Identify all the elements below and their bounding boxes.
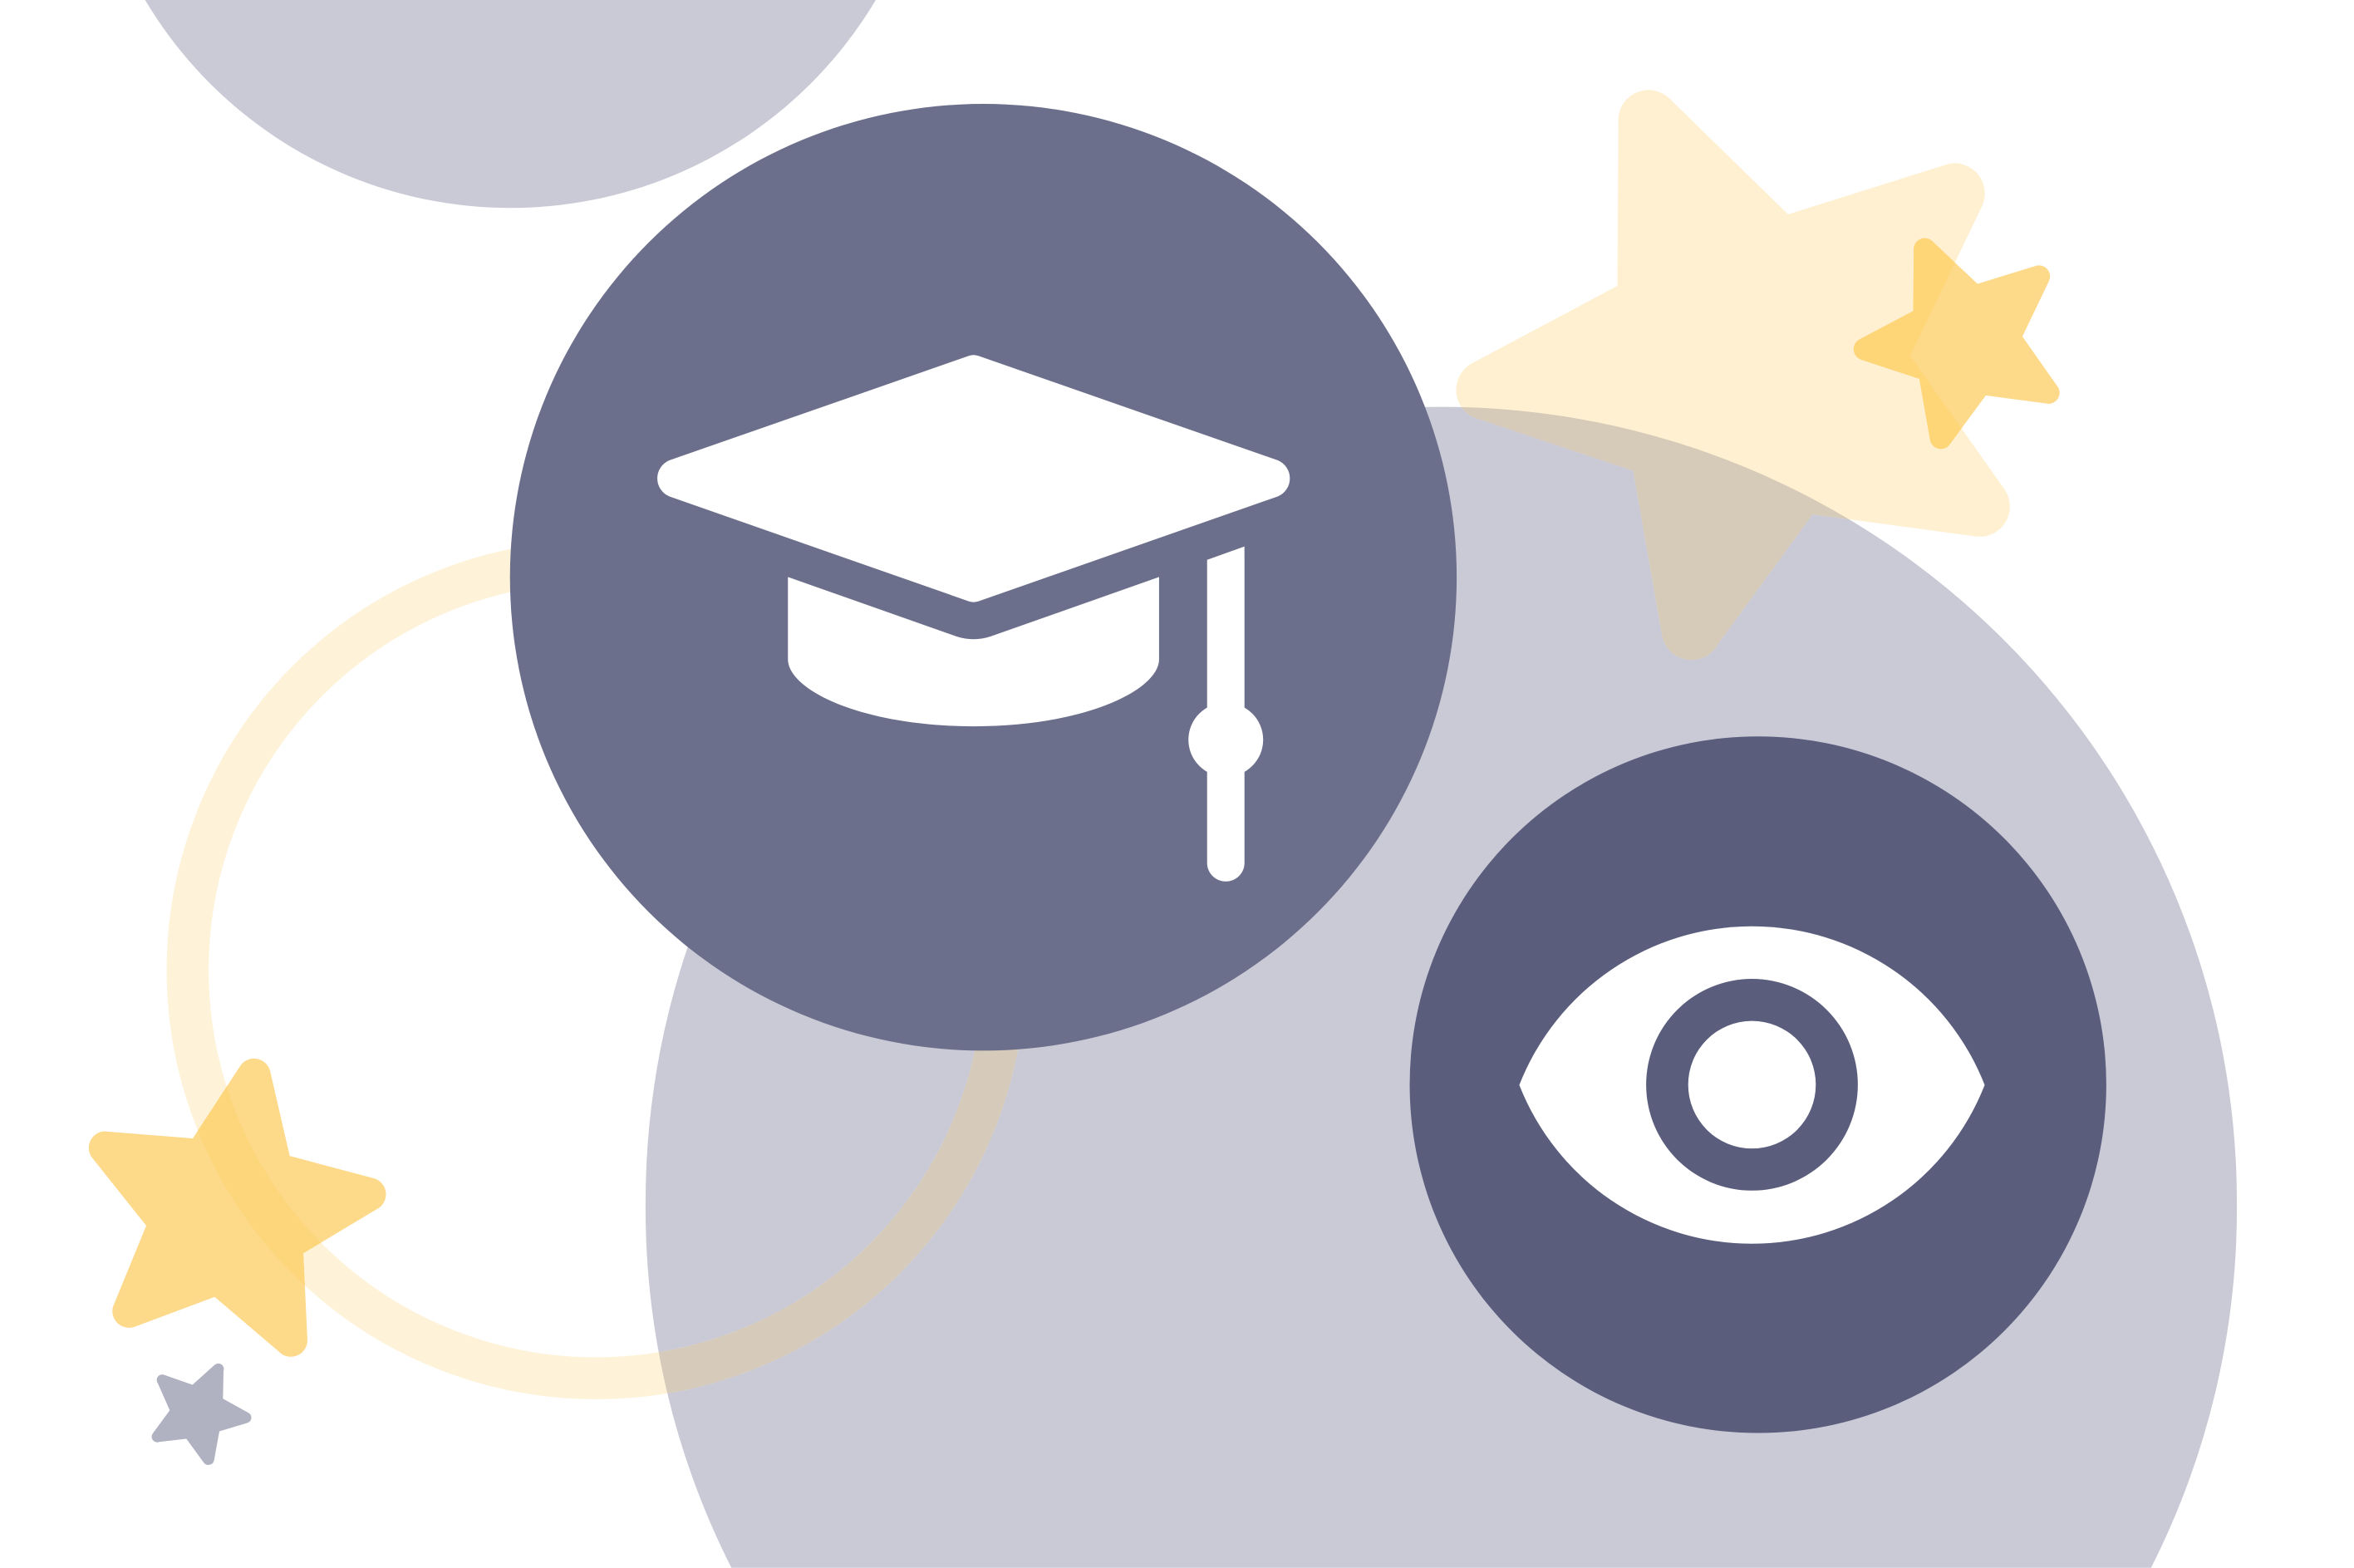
badge circle: dark slate [1410,736,2106,1433]
star: yellow left [88,1059,386,1357]
icon: eye [1519,927,1985,1244]
decorative circle: top lavender [86,0,936,208]
badge circle: slate [510,104,1457,1050]
icon: graduation cap [657,355,1290,882]
star: small grey lower left [152,1364,251,1465]
decorative circle: large lavender [646,407,2237,1568]
star: small yellow top right [1854,238,2060,449]
star: large pale yellow top right [1456,90,2010,660]
decorative ring: pale yellow [188,562,1005,1379]
panel: graduation badge [510,104,1457,1050]
panel: eye badge [1410,736,2106,1433]
